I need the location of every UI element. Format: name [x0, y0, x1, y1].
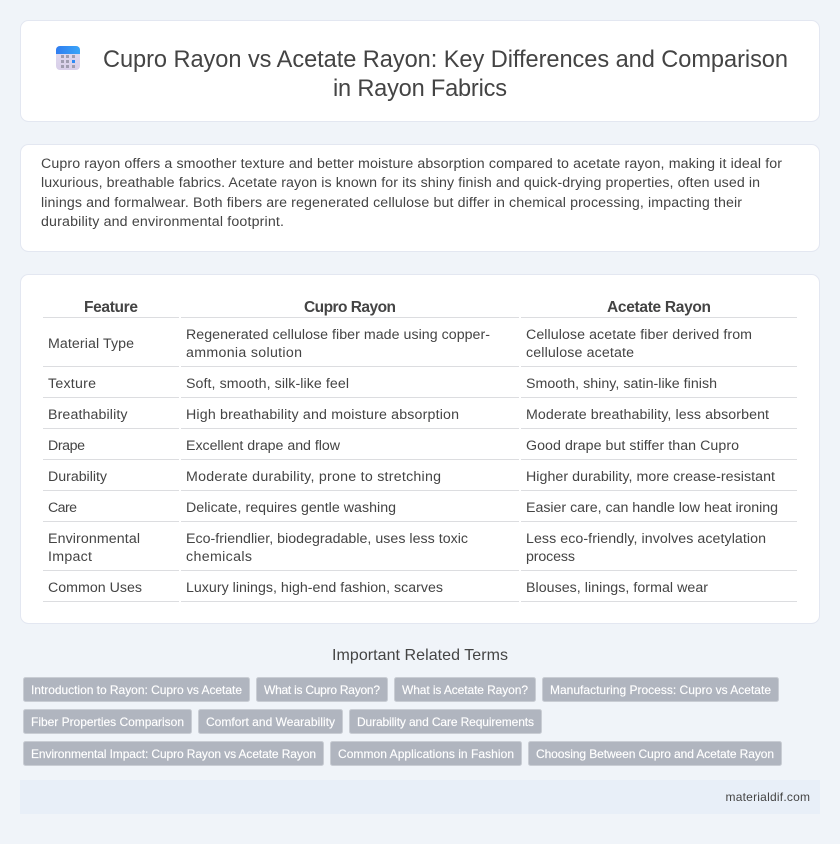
row: breathability	[48, 407, 769, 423]
row: environmental impact: Impact	[48, 549, 92, 565]
row: environmental impact: chemicals	[186, 549, 252, 565]
title: in Rayon Fabrics	[333, 76, 507, 102]
table header row	[84, 299, 711, 316]
tags: related terms: Fiber Properties Comparison	[31, 715, 184, 729]
row: common uses: Common Uses	[48, 580, 142, 596]
panel: header	[20, 20, 820, 122]
tags: related terms	[24, 678, 782, 766]
row: environmental impact: Environmental	[48, 531, 140, 547]
row: environmental impact: process	[526, 549, 575, 565]
row: durability	[48, 469, 775, 485]
tags: related terms: Choosing Between Cupro and Acetate Rayon	[536, 747, 774, 761]
tags: related terms: Introduction to Rayon: Cupro vs Acetate	[31, 683, 242, 697]
row: drape: Drape	[48, 438, 85, 454]
panel: summary text: Cupro rayon offers a smoother texture and better moisture absorption compared to acetate rayon, making it ideal for	[41, 156, 782, 172]
footer	[20, 780, 820, 814]
panel: comparison table	[20, 274, 820, 624]
row: common uses: Blouses, linings, formal wear	[526, 580, 708, 596]
row: environmental impact: Eco-friendlier, biodegradable, uses less toxic	[186, 531, 468, 547]
panel: summary text: luxurious, breathable fabrics. Acetate rayon is known for its shiny finish and quick-drying properties, often used in	[41, 175, 760, 191]
row: breathability: High breathability and moisture absorption	[186, 407, 459, 423]
row: material type: Regenerated cellulose fiber made using copper-	[186, 327, 490, 343]
icon: calendar	[56, 46, 80, 70]
row: common uses	[48, 580, 708, 596]
row: durability: Durability	[48, 469, 108, 485]
row: material type: Cellulose acetate fiber derived from	[526, 327, 752, 343]
footer: materialdif.com	[726, 790, 810, 804]
heading: related terms: Important Related Terms	[332, 647, 508, 664]
row: material type: cellulose acetate	[526, 345, 634, 361]
tags: related terms: Common Applications in Fashion	[338, 747, 514, 761]
row: care	[48, 500, 778, 516]
row: texture: Smooth, shiny, satin-like finish	[526, 376, 717, 392]
row: care: Care	[48, 500, 77, 516]
row: drape	[48, 438, 739, 454]
row: texture: Soft, smooth, silk-like feel	[186, 376, 349, 392]
panel: summary text: linings and formalwear. Both fibers are regenerated cellulose but differ in chemical processing, impacting their	[41, 195, 742, 211]
row: durability: Moderate durability, prone to stretching	[186, 469, 441, 485]
tags: related terms: What is Acetate Rayon?	[402, 683, 528, 697]
row: drape: Good drape but stiffer than Cupro	[526, 438, 739, 454]
row: drape: Excellent drape and flow	[186, 438, 341, 454]
row: care: Delicate, requires gentle washing	[186, 500, 396, 516]
row: material type: Material Type	[48, 336, 134, 352]
panel: summary text	[20, 144, 820, 252]
title	[103, 47, 788, 102]
row: material type: ammonia solution	[186, 345, 302, 361]
row: care: Easier care, can handle low heat ironing	[526, 500, 778, 516]
panel: summary text: durability and environmental footprint.	[41, 214, 284, 230]
row: material type	[48, 327, 752, 361]
tags: related terms: Environmental Impact: Cupro Rayon vs Acetate Rayon	[31, 747, 316, 761]
row: environmental impact: Less eco-friendly, involves acetylation	[526, 531, 766, 547]
row: texture	[48, 376, 717, 392]
table header row: Acetate Rayon	[607, 299, 711, 316]
tags: related terms: What is Cupro Rayon?	[264, 683, 380, 697]
row: breathability: Moderate breathability, less absorbent	[526, 407, 769, 423]
row: common uses: Luxury linings, high-end fashion, scarves	[186, 580, 443, 596]
tags: related terms: Manufacturing Process: Cupro vs Acetate	[550, 683, 771, 697]
tags: related terms: Comfort and Wearability	[206, 715, 335, 729]
tags: related terms: Durability and Care Requirements	[357, 715, 534, 729]
row: durability: Higher durability, more crease-resistant	[526, 469, 775, 485]
title: Cupro Rayon vs Acetate Rayon: Key Differences and Comparison	[103, 47, 788, 73]
table header row: Feature	[84, 299, 138, 316]
table header row: Cupro Rayon	[304, 299, 396, 316]
row: breathability: Breathability	[48, 407, 128, 423]
row: texture: Texture	[48, 376, 96, 392]
row: environmental impact	[48, 531, 766, 565]
